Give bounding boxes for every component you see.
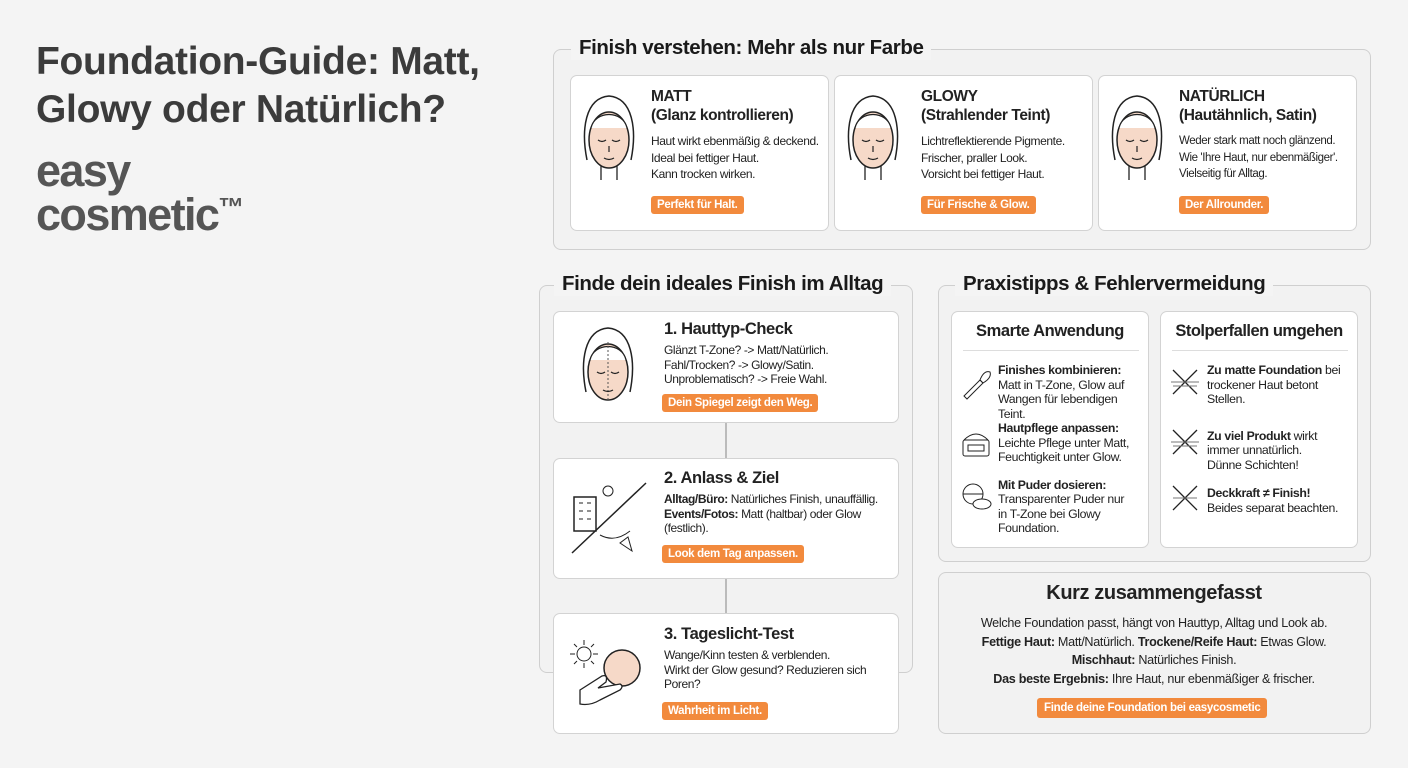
text: Vielseitig für Alltag.: [1179, 168, 1267, 180]
text: [921, 88, 1065, 181]
text: [664, 320, 828, 386]
badge: Für Frische & Glow.: [927, 199, 1030, 211]
icon: powder: [962, 484, 992, 510]
tip list: Matt in T-Zone, Glow auf Wangen für lebendigen Teint.: [998, 378, 1124, 420]
step 2: [553, 458, 899, 579]
badge: Dein Spiegel zeigt den Weg.: [668, 397, 812, 409]
badge: Perfekt für Halt.: [657, 199, 738, 211]
pitfall list: immer unnatürlich.: [1207, 443, 1302, 457]
logo: easy: [36, 145, 130, 196]
icon: cross 3: [1172, 486, 1198, 510]
panel: finish verstehen: [553, 49, 1371, 250]
panel: finde dein finish: [539, 285, 913, 673]
step 3: [553, 613, 899, 734]
icon: cross 1: [1171, 370, 1199, 394]
panel: summary: [938, 572, 1371, 734]
text: Alltag/Büro: Natürliches Finish, unauffällig.: [664, 492, 878, 506]
pitfall list: Zu matte Foundation bei trockener Haut betont Stellen.: [1207, 363, 1340, 406]
button: Finde deine Foundation bei easycosmetic: [1044, 702, 1260, 714]
summary text: [981, 616, 1327, 686]
pitfall list: [1207, 363, 1340, 514]
text: [1179, 87, 1338, 180]
text: Ideal bei fettiger Haut.: [651, 150, 759, 164]
text: (Glanz kontrollieren): [651, 107, 793, 124]
badge: [921, 196, 1036, 214]
text: (Hautähnlich, Satin): [1179, 107, 1317, 124]
text: 3. Tageslicht-Test: [664, 625, 794, 643]
icon: hand and sun: [570, 640, 641, 706]
text: Weder stark matt noch glänzend.: [1179, 135, 1335, 147]
badge: Wahrheit im Licht.: [668, 705, 762, 717]
summary text: Das beste Ergebnis: Ihre Haut, nur ebenmäßiger & frischer.: [993, 672, 1315, 686]
icon: cross 2: [1171, 430, 1199, 454]
tip list: [998, 363, 1129, 535]
tip list: Leichte Pflege unter Matt, Feuchtigkeit unter Glow.: [998, 436, 1129, 464]
title: Glowy oder Natürlich?: [36, 88, 446, 131]
card: glowy: [834, 75, 1093, 231]
icon: face glowy: [848, 95, 898, 180]
badge: Der Allrounder.: [1185, 199, 1263, 211]
heading: Praxistipps & Fehlervermeidung: [963, 272, 1265, 295]
pitfall list: Deckkraft ≠ Finish!: [1207, 486, 1310, 500]
text: 2. Anlass & Ziel: [664, 469, 779, 487]
tip list: Transparenter Puder nur in T-Zone bei Glowy Foundation.: [998, 492, 1124, 535]
text: [651, 88, 819, 181]
icon: face natural: [1112, 95, 1162, 180]
pitfall list: Zu viel Produkt wirkt: [1207, 428, 1317, 442]
icon: face matt: [584, 95, 634, 180]
button: [1037, 698, 1267, 718]
title: Foundation-Guide: Matt,: [36, 40, 480, 83]
text: Frischer, praller Look.: [921, 150, 1027, 164]
summary text: Mischhaut: Natürliches Finish.: [1072, 653, 1236, 667]
subheading: Smarte Anwendung: [976, 322, 1124, 340]
text: Wirkt der Glow gesund? Reduzieren sich Poren?: [664, 662, 866, 691]
card: matt: [570, 75, 829, 231]
text: Unproblematisch? -> Freie Wahl.: [664, 372, 827, 386]
text: NATÜRLICH: [1179, 88, 1265, 105]
text: Vorsicht bei fettiger Haut.: [921, 167, 1044, 181]
badge: [662, 702, 768, 720]
title: [36, 40, 480, 131]
logo: cosmetic™: [36, 189, 244, 240]
icon: face check: [582, 327, 634, 401]
badge: [1179, 196, 1269, 214]
text: Wange/Kinn testen & verblenden.: [664, 648, 830, 662]
text: GLOWY: [921, 88, 978, 105]
panel: praxistipps: [938, 285, 1371, 562]
tip list: Finishes kombinieren:: [998, 363, 1121, 377]
card: stolperfallen: [1160, 311, 1358, 548]
icon: office and party: [572, 482, 646, 554]
pitfall list: Beides separat beachten.: [1207, 500, 1338, 514]
summary text: Welche Foundation passt, hängt von Hauttyp, Alltag und Look ab.: [981, 616, 1327, 630]
text: Wie 'Ihre Haut, nur ebenmäßiger'.: [1179, 152, 1338, 164]
icon: jar: [962, 434, 990, 456]
text: Glänzt T-Zone? -> Matt/Natürlich.: [664, 343, 828, 357]
card: smarte anwendung: [951, 311, 1149, 548]
text: MATT: [651, 88, 691, 105]
heading: Kurz zusammengefasst: [1046, 582, 1262, 604]
tip list: Mit Puder dosieren:: [998, 478, 1106, 492]
tip list: Hautpflege anpassen:: [998, 421, 1119, 435]
badge: [651, 196, 744, 214]
text: Fahl/Trocken? -> Glowy/Satin.: [664, 358, 814, 372]
step 1: [553, 311, 899, 423]
subheading: Stolperfallen umgehen: [1175, 322, 1343, 340]
badge: [662, 545, 804, 563]
text: [664, 469, 878, 535]
summary text: Fettige Haut: Matt/Natürlich. Trockene/Reife Haut: Etwas Glow.: [982, 634, 1326, 648]
heading: Finde dein ideales Finish im Alltag: [562, 272, 883, 295]
text: [664, 625, 866, 691]
text: Kann trocken wirken.: [651, 167, 755, 181]
logo: [36, 145, 244, 240]
connector line: [725, 422, 726, 614]
text: Events/Fotos: Matt (haltbar) oder Glow (festlich).: [664, 506, 861, 535]
icon: brush: [963, 371, 991, 400]
text: Lichtreflektierende Pigmente.: [921, 134, 1065, 148]
badge: Look dem Tag anpassen.: [668, 548, 798, 560]
text: (Strahlender Teint): [921, 107, 1050, 124]
card: natuerlich: [1098, 75, 1357, 231]
heading: Finish verstehen: Mehr als nur Farbe: [579, 36, 923, 59]
pitfall list: Dünne Schichten!: [1207, 458, 1298, 472]
badge: [662, 394, 818, 412]
text: 1. Hauttyp-Check: [664, 320, 792, 338]
text: Haut wirkt ebenmäßig & deckend.: [651, 134, 819, 148]
